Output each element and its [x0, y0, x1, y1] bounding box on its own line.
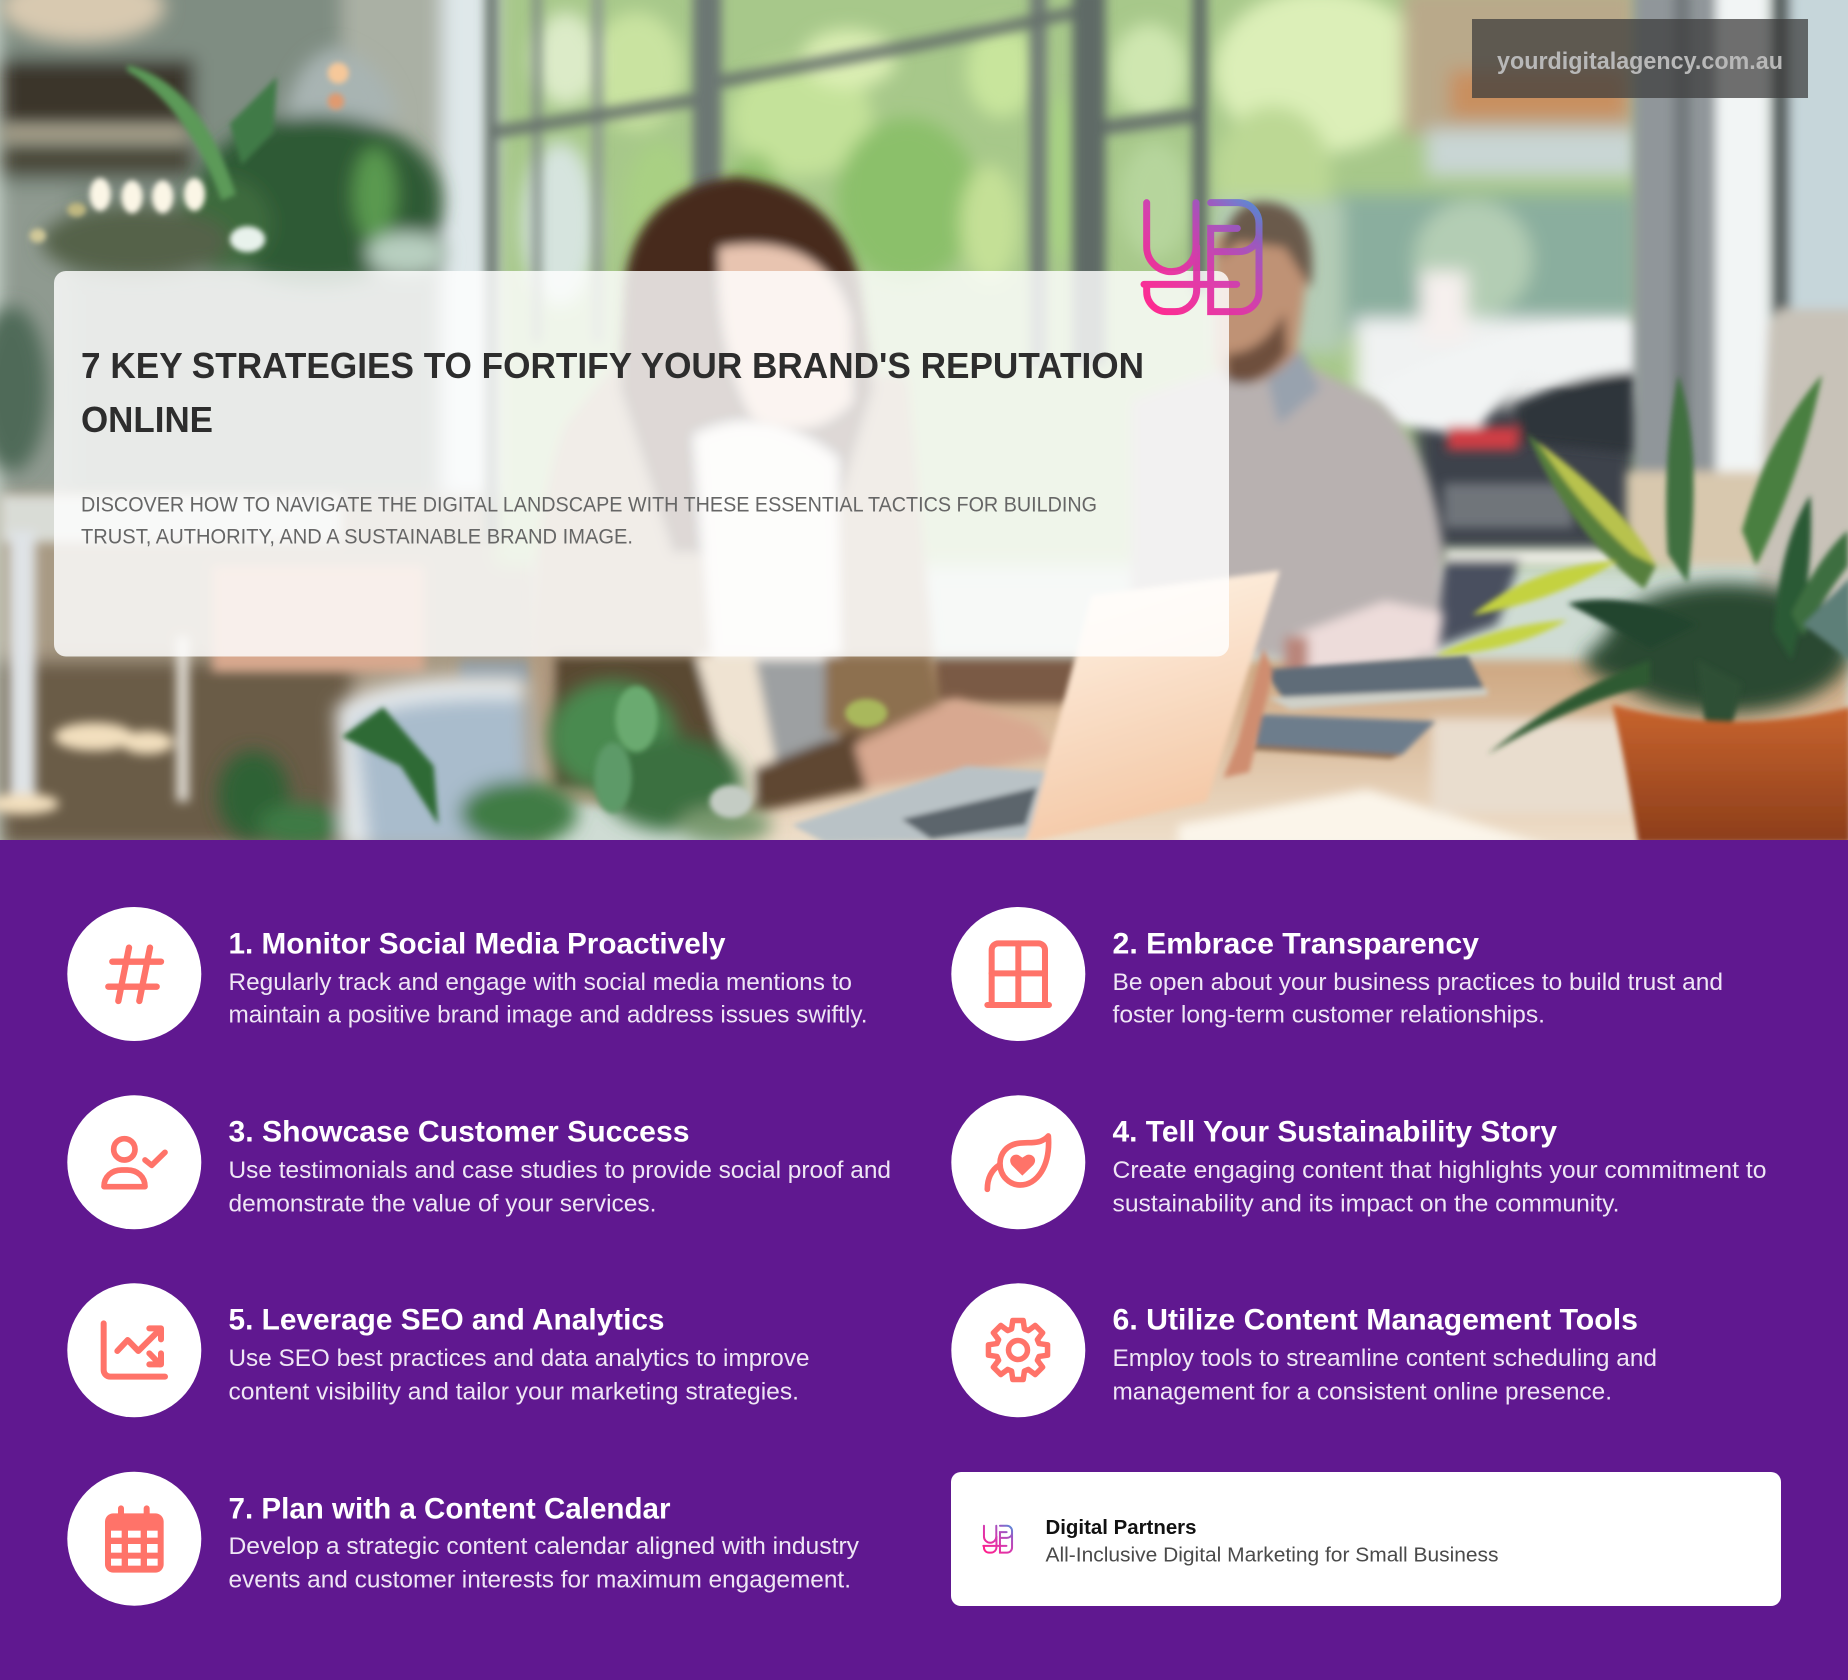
site address tag	[1472, 19, 1808, 98]
item 1: Regularly track and engage with social media mentions to	[228, 969, 852, 996]
purple content background	[0, 840, 1848, 1680]
item 6	[951, 1283, 1657, 1417]
logo	[1144, 203, 1259, 312]
item 5: 5. Leverage SEO and Analytics	[228, 1304, 664, 1336]
item 2	[951, 907, 1723, 1041]
item 7: events and customer interests for maximum engagement.	[228, 1566, 851, 1594]
item 4: sustainability and its impact on the community.	[1112, 1190, 1620, 1218]
item 3: demonstrate the value of your services.	[228, 1190, 656, 1218]
man	[1214, 194, 1451, 670]
icon: gear	[951, 1283, 1085, 1417]
potted plant	[1436, 375, 1848, 843]
title	[81, 345, 1144, 440]
desk surface	[731, 658, 1848, 849]
item 3: 3. Showcase Customer Success	[228, 1116, 690, 1148]
subtitle	[81, 494, 1097, 548]
item 4	[951, 1095, 1766, 1229]
item 6: 6. Utilize Content Management Tools	[1112, 1304, 1638, 1336]
brand card	[951, 1472, 1781, 1606]
brand card: All-Inclusive Digital Marketing for Small Business	[1046, 1544, 1498, 1566]
item 2: Be open about your business practices to build trust and	[1112, 969, 1723, 996]
icon: analytics chart	[67, 1283, 201, 1417]
item 3: Use testimonials and case studies to provide social proof and	[228, 1157, 891, 1184]
item 2: 2. Embrace Transparency	[1112, 928, 1479, 960]
title: ONLINE	[81, 399, 213, 440]
item 5: Use SEO best practices and data analytics to improve	[228, 1345, 810, 1372]
item 4: 4. Tell Your Sustainability Story	[1112, 1116, 1557, 1148]
string lights	[90, 178, 205, 213]
icon: calendar	[67, 1472, 201, 1606]
foreground chair and leaves	[218, 677, 772, 849]
icon: window	[951, 907, 1085, 1041]
woman	[530, 177, 1055, 813]
item 3	[67, 1095, 891, 1229]
icon: leaf with heart	[951, 1095, 1085, 1229]
item 6: management for a consistent online presence.	[1112, 1378, 1612, 1405]
item 6: Employ tools to streamline content scheduling and	[1112, 1345, 1657, 1372]
left interior plants and lamps	[0, 0, 447, 471]
title panel	[54, 271, 1229, 656]
item 5: content visibility and tailor your marketing strategies.	[228, 1378, 799, 1405]
brand card: Digital Partners	[1046, 1517, 1196, 1539]
title: 7 KEY STRATEGIES TO FORTIFY YOUR BRAND'S REPUTATION	[81, 345, 1144, 386]
item 1: maintain a positive brand image and address issues swiftly.	[228, 1002, 868, 1028]
item 5	[67, 1283, 810, 1417]
icon: person with check	[67, 1095, 201, 1229]
item 7: 7. Plan with a Content Calendar	[228, 1492, 671, 1526]
icon: small logo	[983, 1526, 1012, 1553]
subtitle: DISCOVER HOW TO NAVIGATE THE DIGITAL LANDSCAPE WITH THESE ESSENTIAL TACTICS FOR BUILDING	[81, 494, 1097, 516]
item 2: foster long-term customer relationships.	[1112, 1002, 1545, 1028]
site address tag: yourdigitalagency.com.au	[1497, 48, 1783, 75]
item 7: Develop a strategic content calendar aligned with industry	[228, 1533, 860, 1560]
notebooks	[1249, 655, 1487, 759]
table, leg and floor	[0, 495, 530, 814]
item 1	[67, 907, 868, 1041]
hero photo: two people working at laptop in a bright office	[0, 0, 1848, 849]
laptop	[792, 570, 1280, 843]
subtitle: TRUST, AUTHORITY, AND A SUSTAINABLE BRAND IMAGE.	[81, 526, 633, 548]
item 4: Create engaging content that highlights your commitment to	[1112, 1157, 1766, 1184]
item 7	[67, 1472, 860, 1606]
item 1: 1. Monitor Social Media Proactively	[228, 928, 726, 960]
icon: hashtag	[67, 907, 201, 1041]
